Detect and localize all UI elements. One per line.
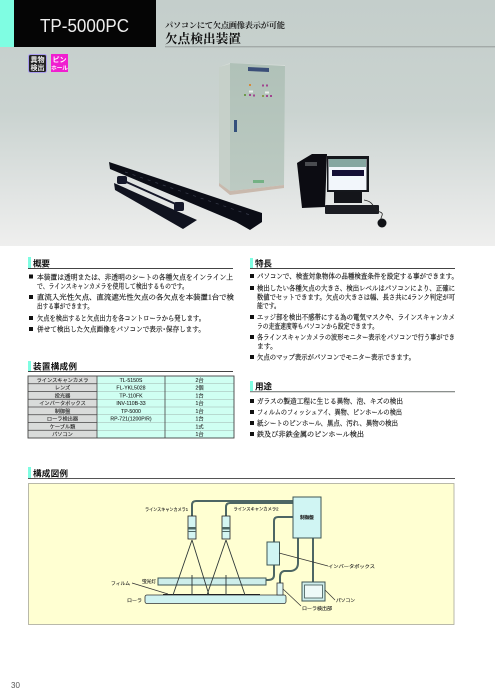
control panel	[293, 497, 321, 538]
icon: pinhole badge: ピン	[52, 56, 66, 64]
text: overview bullets: で、ラインスキャンカメラを使用して検出するものです。	[37, 282, 188, 290]
diagram labels: フィルム	[111, 581, 130, 586]
table: equipment list: ラインスキャンカメラ	[37, 377, 88, 384]
table: equipment list: TP-5000	[121, 409, 141, 415]
roller	[145, 595, 286, 604]
heading: overview: 概要	[33, 258, 50, 268]
diagram labels: ローラ	[127, 598, 142, 604]
table: equipment list: パソコン	[52, 431, 73, 438]
heading: configuration diagram: 構成図例	[33, 468, 68, 478]
leader lines	[132, 553, 335, 606]
table: equipment list: 1台	[195, 430, 204, 438]
heading: configuration example: 装置構成例	[33, 360, 77, 372]
inverter box	[267, 542, 280, 565]
fluorescent lamp	[158, 578, 266, 585]
section: configuration diagram	[28, 467, 455, 624]
heading: features	[250, 258, 455, 269]
table: equipment list: TP-110FK	[119, 394, 143, 400]
text: features bullets: ラの走査速度等もパソコンから設定できます。	[257, 322, 378, 330]
text: features bullets: 検出したい各種欠点の大きさ、検出レベルはパソコンにより、正確に	[257, 284, 455, 292]
text: features bullets: 数値でセットできます。欠点の大きさは幅、長さ共に4ランク判定が可	[257, 292, 455, 302]
table: equipment list: 2台	[195, 376, 204, 384]
table: equipment list: TL-5150S	[120, 378, 143, 384]
text: applications bullets: 紙シートのピンホール、黒点、汚れ、異物の検出	[257, 418, 398, 428]
icon: pinhole badge: ホール	[51, 65, 68, 72]
text: features bullets: 各ラインスキャンカメラの波形モニター表示をパソコンで行う事ができ	[257, 332, 455, 342]
table: equipment list: RP-721(1200P/R)	[110, 417, 152, 423]
table: equipment list	[28, 376, 234, 438]
table: equipment list: 投光器	[55, 392, 71, 400]
film	[163, 594, 260, 596]
table: equipment list: レンズ	[55, 384, 70, 392]
table: equipment list: INV-110B-33	[116, 401, 146, 407]
header background panel	[0, 0, 495, 246]
table: equipment list: ケーブル類	[50, 422, 76, 430]
heading: applications	[250, 380, 455, 392]
text: features bullets: 欠点のマップ表示がパソコンでモニター表示できます。	[257, 352, 415, 362]
camera 2	[222, 516, 230, 539]
text: features bullets	[250, 272, 458, 362]
heading: configuration example	[28, 360, 233, 372]
text: applications bullets	[250, 396, 403, 438]
diagram labels: パソコン	[336, 598, 355, 603]
diagram labels: ラインスキャンカメラ2	[234, 506, 279, 512]
text: applications bullets: ガラスの製造工程に生じる異物、泡、キズの検出	[257, 396, 403, 406]
photo: control cabinet	[219, 63, 285, 195]
section: features	[250, 258, 458, 362]
table: equipment list: 1式	[195, 422, 204, 430]
text: applications bullets: フィルムのフィッシュアイ、異物、ピンホールの検出	[257, 408, 402, 416]
photo: computer with monitor, keyboard and mouse	[297, 154, 386, 228]
computer monitor	[302, 582, 325, 601]
control panel: 制御盤	[300, 514, 314, 521]
subtitle and product name	[165, 20, 495, 47]
text: overview bullets: 本装置は透明または、非透明のシートの各種欠点をインライン上	[37, 272, 233, 282]
section: configuration example	[28, 360, 234, 438]
title block	[0, 0, 156, 47]
panel: diagram background	[28, 484, 454, 624]
text: overview bullets: 出する事ができます。	[37, 302, 93, 310]
text: features bullets: エッジ部を検出不感帯にする為の電気マスクや、ラインスキャンカメ	[257, 312, 455, 322]
diagram labels: ラインスキャンカメラ1	[145, 507, 188, 513]
table: equipment list: 1台	[195, 392, 204, 400]
text: applications bullets: 鉄及び非鉄金属のピンホール検出	[257, 430, 364, 438]
diagram labels	[111, 506, 375, 612]
heading: configuration diagram	[28, 467, 455, 479]
title block: TP-5000PC	[40, 16, 129, 36]
icon: foreign matter detection badge: 異物	[30, 55, 44, 64]
table: equipment list: 制御盤	[55, 407, 70, 415]
text: features bullets: パソコンで、検査対象物体の品種検査条件を設定する事ができます。	[257, 272, 458, 280]
text: overview bullets: 直流入光性欠点、直流遮光性欠点の各欠点を本装置1台で検	[37, 292, 234, 302]
heading: overview	[28, 257, 233, 269]
subtitle and product name: 欠点検出装置	[165, 31, 241, 46]
table: equipment list: 1台	[195, 407, 204, 415]
heading: applications: 用途	[255, 380, 272, 392]
table: equipment list: インバータボックス	[39, 399, 86, 407]
camera 1	[188, 516, 196, 539]
subtitle and product name: パソコンにて欠点画像表示が可能	[165, 20, 285, 30]
icon: foreign matter detection badge	[28, 54, 46, 72]
text: overview bullets: 併せて検出した欠点画像をパソコンで表示･保存します。	[37, 324, 205, 334]
table: equipment list: FL-YKL5028	[116, 386, 146, 392]
table: equipment list: ローラ検出器	[47, 415, 79, 423]
table: equipment list: 1台	[195, 399, 204, 407]
table: equipment list: 2個	[195, 384, 204, 392]
section: applications	[250, 380, 455, 438]
heading: features: 特長	[255, 258, 272, 268]
diagram: system layout	[111, 497, 375, 612]
section: overview	[28, 257, 234, 334]
table: equipment list: 1台	[195, 415, 204, 423]
photo: line scan camera rail and lamp	[109, 162, 262, 230]
page number: 30	[11, 681, 20, 690]
cables	[192, 501, 313, 583]
diagram labels: ローラ検出部	[302, 605, 332, 612]
icon: pinhole badge	[51, 54, 68, 72]
roller detector	[277, 583, 283, 595]
diagram labels: 蛍光灯	[142, 578, 156, 585]
diagram labels: インバータボックス	[328, 563, 375, 570]
text: overview bullets: 欠点を検出すると欠点出力を各コントローラから発します。	[37, 314, 205, 322]
text: features bullets: ます。	[257, 342, 277, 350]
icon: foreign matter detection badge: 検出	[30, 63, 44, 72]
camera view lines	[173, 540, 245, 595]
text: overview bullets	[29, 272, 234, 334]
text: features bullets: 能です。	[257, 301, 280, 310]
